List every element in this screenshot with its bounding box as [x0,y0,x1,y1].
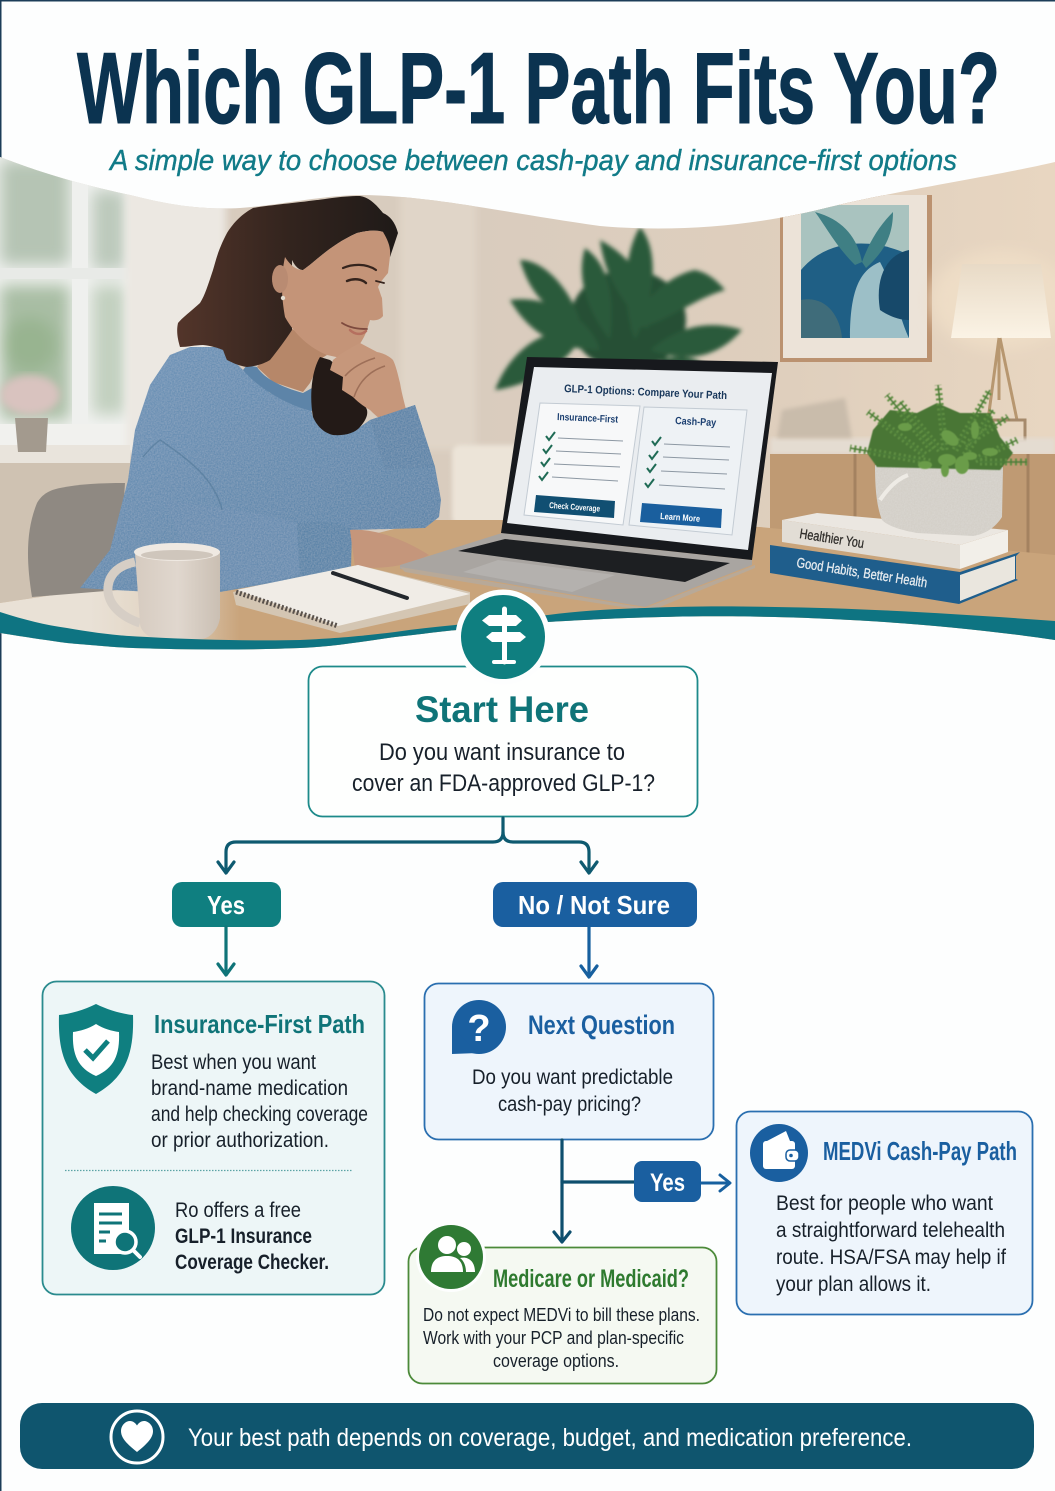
screen card: insurance-first [524,403,640,525]
insurance-first description: brand-name medication [151,1077,348,1100]
medicare description [423,1305,700,1371]
panel: medvi cash-pay path [736,1112,1032,1314]
medvi description: route. HSA/FSA may help if [776,1246,1006,1269]
next question text: cash-pay pricing? [498,1093,641,1116]
sideboard [770,398,1055,558]
chair [28,483,125,597]
face [282,231,390,360]
footer message: Your best path depends on coverage, budget, and medication preference. [188,1424,912,1452]
start here question [352,739,655,797]
subtitle: A simple way to choose between cash-pay and insurance-first options [108,145,957,177]
books: Healthier You [799,525,865,551]
next question text [472,1066,673,1116]
insurance-first description: and help checking coverage [151,1103,368,1126]
brow, eye and mouth [342,265,384,334]
no or not sure pill [493,882,697,927]
woman [80,196,441,592]
coverage checker note: GLP-1 Insurance [175,1225,312,1248]
screen card: cash-pay: Cash-Pay [675,415,717,429]
icon: question bubble [452,1000,506,1054]
arrow: next question down to medicare or medicaid [554,1140,634,1242]
hand on table [350,530,429,568]
wall column [403,197,472,446]
collar [243,365,312,411]
sleeve cuff [370,405,435,470]
yes pill: Yes [207,890,245,920]
icon: shield with check [59,1004,133,1094]
icon: coverage document search [71,1186,155,1270]
medicare description: coverage options. [493,1351,619,1371]
start here question: Do you want insurance to [379,739,625,766]
start here box [308,666,698,816]
coverage checker note: Coverage Checker. [175,1251,329,1274]
background plant [495,227,742,390]
earring [281,296,285,300]
sofa cushion [451,444,514,520]
neck [257,325,327,392]
blue book [770,545,1020,604]
yes pill to cash-pay path [634,1161,701,1202]
medvi description: your plan allows it. [776,1273,931,1296]
mug [108,543,220,640]
start here heading: Start Here [415,689,589,730]
hair [177,196,398,367]
icon: wallet [750,1124,808,1182]
icon: heart [111,1411,163,1463]
panel: next question [424,984,714,1140]
medvi description [776,1192,1006,1296]
screen card: cash-pay: Learn More [660,511,700,524]
medicare description: Do not expect MEDVi to bill these plans. [423,1305,700,1325]
icon: people [416,1222,486,1292]
books: Good Habits, Better Health [796,554,928,590]
screen card: insurance-first: Check Coverage [549,500,601,514]
panel: medicare or medicaid [408,1222,716,1384]
sweater [80,347,441,592]
arrow: yes to insurance-first path [218,927,234,975]
yes pill to cash-pay path: Yes [650,1169,685,1197]
medvi description: a straightforward telehealth [776,1219,1005,1242]
icon: question bubble: ? [467,1008,491,1050]
ear [272,265,288,293]
white book [782,520,960,569]
laptop screen heading: GLP-1 Options: Compare Your Path [564,383,727,402]
forearm and cuff [288,572,299,576]
hand at chin [330,343,408,423]
coverage checker note [175,1199,329,1274]
insurance-first description: Best when you want [151,1051,316,1074]
medvi description: Best for people who want [776,1192,993,1215]
arrow: no to next question [581,927,597,977]
start here question: cover an FDA-approved GLP-1? [352,770,655,797]
notebook and pen [233,565,470,633]
icon: signpost [456,590,550,684]
arrow: yes to medvi cash-pay path [701,1175,730,1191]
panel: insurance-first path [42,982,384,1294]
framed art [780,195,932,362]
medicare description: Work with your PCP and plan-specific [423,1328,684,1348]
footer banner [20,1403,1034,1469]
yes pill [172,882,281,927]
table surface [0,520,1055,650]
next question heading: Next Question [528,1010,675,1040]
potted plant [850,385,1027,536]
insurance-first heading: Insurance-First Path [154,1009,365,1039]
hair falling over chest [311,357,367,435]
medicare heading: Medicare or Medicaid? [493,1265,689,1293]
table lamp [930,250,1055,442]
insurance-first description [151,1051,368,1152]
teal wave band under photo [0,606,1055,650]
books [770,513,1020,604]
window with garden view [0,150,226,613]
next question text: Do you want predictable [472,1066,673,1089]
laptop lid [501,357,778,560]
laptop base [400,533,752,607]
screen card: cash-pay [629,407,747,535]
no or not sure pill: No / Not Sure [518,890,670,920]
laptop [400,357,778,611]
screen card: insurance-first: Insurance-First [557,412,619,426]
insurance-first description: or prior authorization. [151,1129,329,1152]
coverage checker note: Ro offers a free [175,1199,301,1222]
arrow: split from start box to yes and no [218,818,597,873]
hero photo: woman comparing GLP-1 options on a laptop [0,150,1055,650]
